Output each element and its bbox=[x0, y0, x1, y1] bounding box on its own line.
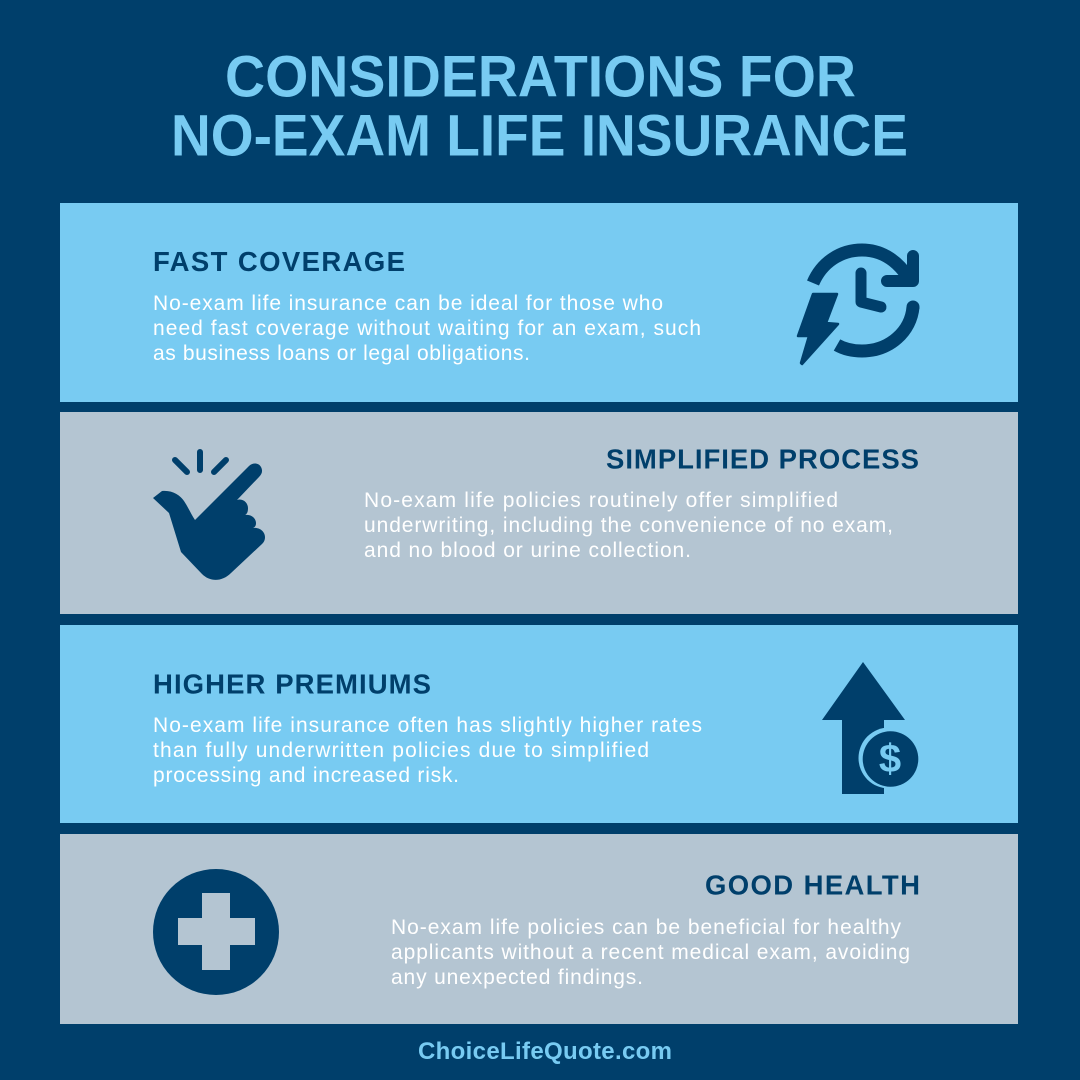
title: CONSIDERATIONS FOR bbox=[225, 44, 856, 110]
icon: medical cross bbox=[153, 869, 279, 995]
panel: fast coverage bbox=[60, 203, 1018, 402]
text block: simplified process: and no blood or urine collection. bbox=[364, 539, 691, 562]
panel: simplified process bbox=[60, 412, 1018, 614]
title bbox=[171, 44, 908, 168]
footer website: ChoiceLifeQuote.com bbox=[418, 1038, 672, 1065]
text block: simplified process: No-exam life policies routinely offer simplified bbox=[364, 489, 838, 512]
title: NO-EXAM LIFE INSURANCE bbox=[171, 104, 908, 168]
icon: up arrow with dollar coin bbox=[822, 662, 920, 794]
panel: higher premiums bbox=[60, 625, 1018, 823]
text block: good health: applicants without a recent medical exam, avoiding bbox=[391, 941, 910, 964]
text block: simplified process: underwriting, including the convenience of no exam, bbox=[364, 514, 893, 537]
text block: fast coverage: need fast coverage without waiting for an exam, such bbox=[153, 317, 701, 340]
text block: good health: any unexpected findings. bbox=[391, 966, 643, 989]
heading: good health: GOOD HEALTH bbox=[705, 870, 920, 900]
icon: finger snap hand bbox=[153, 452, 265, 580]
heading: higher premiums: HIGHER PREMIUMS bbox=[153, 668, 431, 700]
text block: fast coverage: as business loans or legal obligations. bbox=[153, 342, 530, 365]
text block: simplified process bbox=[364, 489, 893, 562]
heading: fast coverage: FAST COVERAGE bbox=[153, 246, 405, 277]
text block: good health bbox=[391, 916, 910, 989]
text block: higher premiums bbox=[153, 714, 702, 787]
text block: higher premiums: processing and increased risk. bbox=[153, 764, 459, 787]
text block: fast coverage: No-exam life insurance can be ideal for those who bbox=[153, 292, 663, 315]
icon: clock with lightning bolt bbox=[798, 250, 920, 364]
text block: higher premiums: than fully underwritten policies due to simplified bbox=[153, 739, 649, 762]
panel: good health bbox=[60, 834, 1018, 1024]
heading: simplified process: SIMPLIFIED PROCESS bbox=[606, 444, 919, 474]
icon: up arrow with dollar coin: $ bbox=[879, 737, 901, 781]
text block: good health: No-exam life policies can be beneficial for healthy bbox=[391, 916, 902, 939]
text block: higher premiums: No-exam life insurance often has slightly higher rates bbox=[153, 714, 702, 737]
text block: fast coverage bbox=[153, 292, 701, 365]
